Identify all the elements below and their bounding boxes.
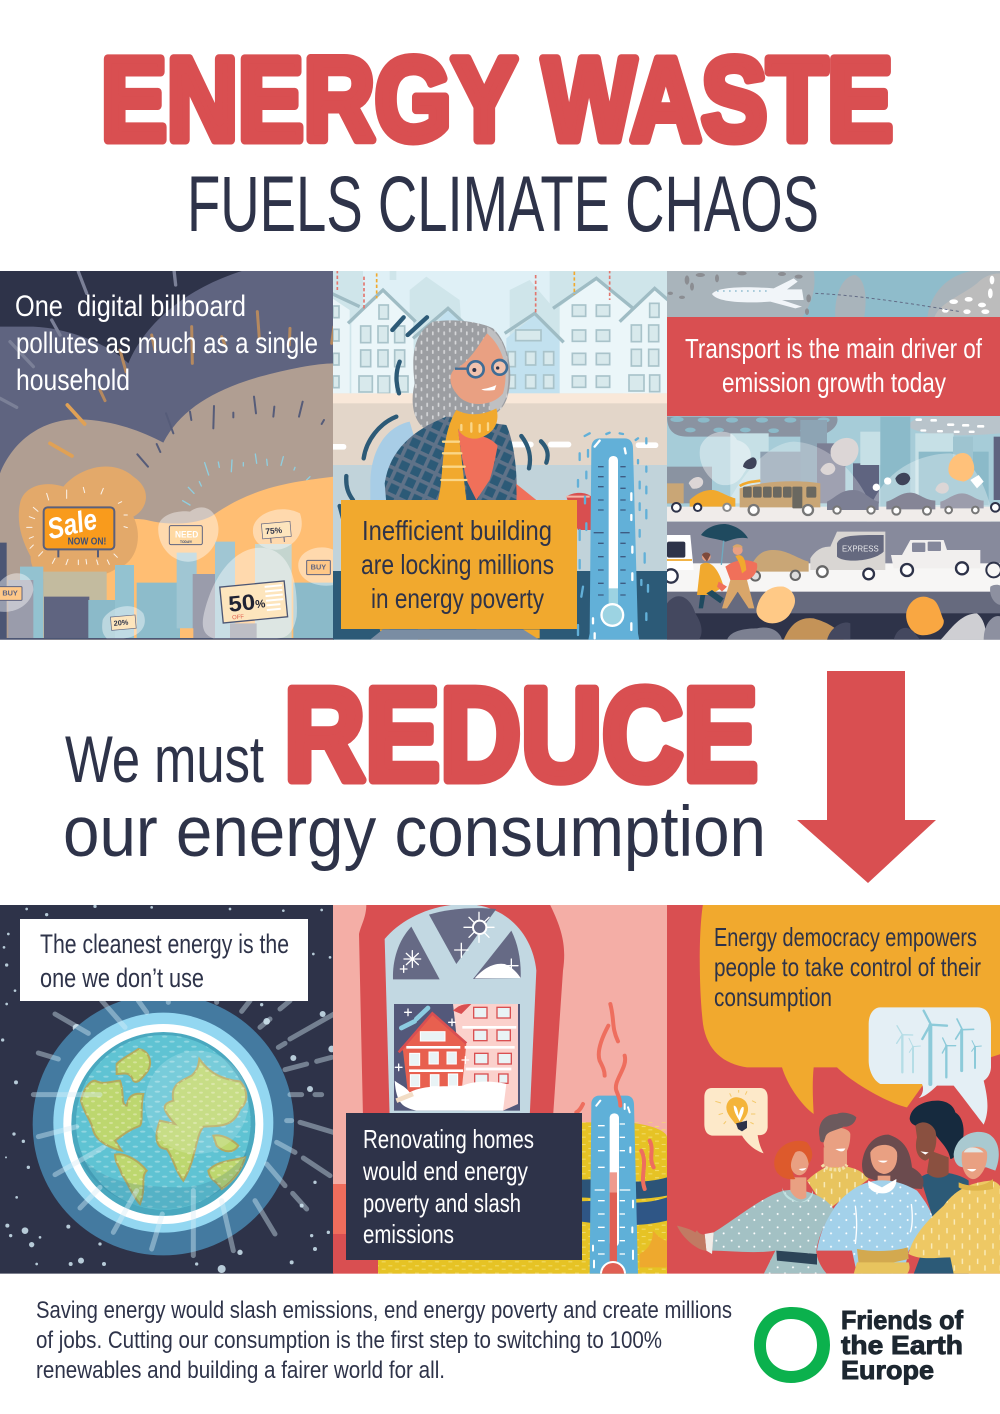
- callout: transport: [667, 317, 1000, 416]
- woman red hair: [677, 1141, 834, 1274]
- text: energy democracy: [714, 922, 981, 1012]
- thermometer: hot: [590, 1096, 638, 1286]
- buy sign: [307, 560, 330, 575]
- panel text: billboard: [15, 290, 318, 397]
- heading: we must: We must: [65, 722, 264, 796]
- man: [807, 1113, 869, 1211]
- callout: renovating homes: would end energy: [362, 1156, 528, 1186]
- logo: friends of the earth europe: Europe: [841, 1355, 934, 1385]
- text: energy democracy: consumption: [714, 982, 832, 1012]
- footer text: [36, 1297, 732, 1384]
- need today sign: TODAY!: [180, 540, 192, 544]
- smoke blobs: [667, 585, 1000, 640]
- logo ring: [754, 1307, 830, 1383]
- callout: inefficient building: Inefficient building: [362, 515, 552, 546]
- woman dark skin: [910, 1101, 969, 1274]
- speech bubble: main: [700, 904, 1000, 1114]
- callout: inefficient building: are locking millions: [361, 549, 554, 580]
- row of houses: [330, 278, 668, 393]
- callout: inefficient building: [341, 500, 577, 629]
- logo: friends of the earth europe: Friends of: [841, 1305, 963, 1335]
- callout: cleanest energy: The cleanest energy is the: [40, 929, 289, 959]
- callout: cleanest energy: [20, 919, 308, 1001]
- woman blue sweater: [817, 1179, 934, 1274]
- 20 percent sign: 20%: [113, 618, 129, 628]
- yellow couch: [378, 1122, 667, 1274]
- panel: inefficient buildings: [330, 270, 668, 642]
- callout: inefficient building: in energy poverty: [371, 583, 544, 614]
- sale billboard: NOW ON!: [68, 537, 106, 548]
- callout: renovating homes: poverty and slash: [363, 1188, 521, 1218]
- lower traffic: EXPRESS: [842, 544, 879, 554]
- 75 percent sign: 75%: [265, 525, 283, 536]
- panel text: billboard: household: [16, 364, 130, 397]
- 50 percent off sign: [220, 581, 288, 623]
- shiver marks: [340, 317, 548, 518]
- panel: transport: [664, 270, 1000, 640]
- light rays: [33, 1001, 334, 1256]
- couple with umbrella: [697, 524, 757, 608]
- 50 percent off sign: OFF: [232, 614, 245, 621]
- speech bubble: wind turbines: [869, 1007, 991, 1125]
- panel: clean earth: [0, 904, 335, 1274]
- heading: our energy consumption: our energy consumption: [63, 793, 766, 872]
- upper road: [667, 507, 1000, 522]
- callout: cleanest energy: one we don’t use: [40, 963, 204, 993]
- buy sign: BUY: [311, 562, 326, 571]
- 20 percent sign: [110, 615, 136, 630]
- panel text: billboard: One digital billboard: [15, 290, 246, 323]
- logo: friends of the earth europe: [754, 1305, 963, 1385]
- panel: energy democracy: [667, 904, 1000, 1274]
- panel: renovating homes: [333, 904, 667, 1286]
- callout: renovating homes: Renovating homes: [363, 1124, 534, 1154]
- upper traffic: [667, 481, 1000, 515]
- callout: transport: emission growth today: [722, 367, 946, 398]
- thermometer: cold: [578, 433, 648, 642]
- window: [385, 904, 536, 1117]
- heading: reduce: REDUCE: [284, 661, 758, 808]
- sale billboard: Sale: [44, 503, 100, 546]
- elderly woman: [909, 1132, 1000, 1274]
- plane: [712, 278, 804, 308]
- buildings row: [0, 542, 334, 638]
- city buildings: [667, 417, 1000, 507]
- panel text: billboard: pollutes as much as a single: [16, 327, 318, 360]
- stars: [1, 905, 335, 1273]
- callout: renovating homes: emissions: [363, 1219, 454, 1249]
- woman in chair: [370, 320, 591, 530]
- speech bubble: light bulb: [704, 1088, 768, 1153]
- buy sign left: [0, 587, 22, 600]
- heat waves: [576, 1004, 654, 1189]
- buy sign left: BUY: [2, 589, 18, 598]
- 50 percent off sign: %: [255, 598, 266, 611]
- need today sign: [169, 526, 202, 545]
- chair legs and shoes: [380, 629, 540, 640]
- woman long hair: [862, 1135, 924, 1189]
- need today sign: NEED: [175, 530, 199, 540]
- callout: renovating homes: [346, 1113, 582, 1260]
- red house: [400, 1014, 466, 1094]
- panel: digital billboard: [0, 270, 334, 641]
- logo: friends of the earth europe: the Earth: [841, 1330, 963, 1360]
- footer text: of jobs. Cutting our consumption is the first step to switching to 100%: [36, 1327, 662, 1354]
- arrow: downward: [797, 671, 936, 883]
- 75 percent sign: [261, 521, 292, 544]
- lower traffic: [664, 532, 1000, 583]
- footer text: Saving energy would slash emissions, end energy poverty and create millions: [36, 1297, 732, 1324]
- 50 percent off sign: 50: [227, 589, 256, 617]
- continents: [81, 1049, 246, 1204]
- footer text: renewables and building a fairer world for all.: [36, 1357, 445, 1384]
- people group: [677, 1101, 1000, 1274]
